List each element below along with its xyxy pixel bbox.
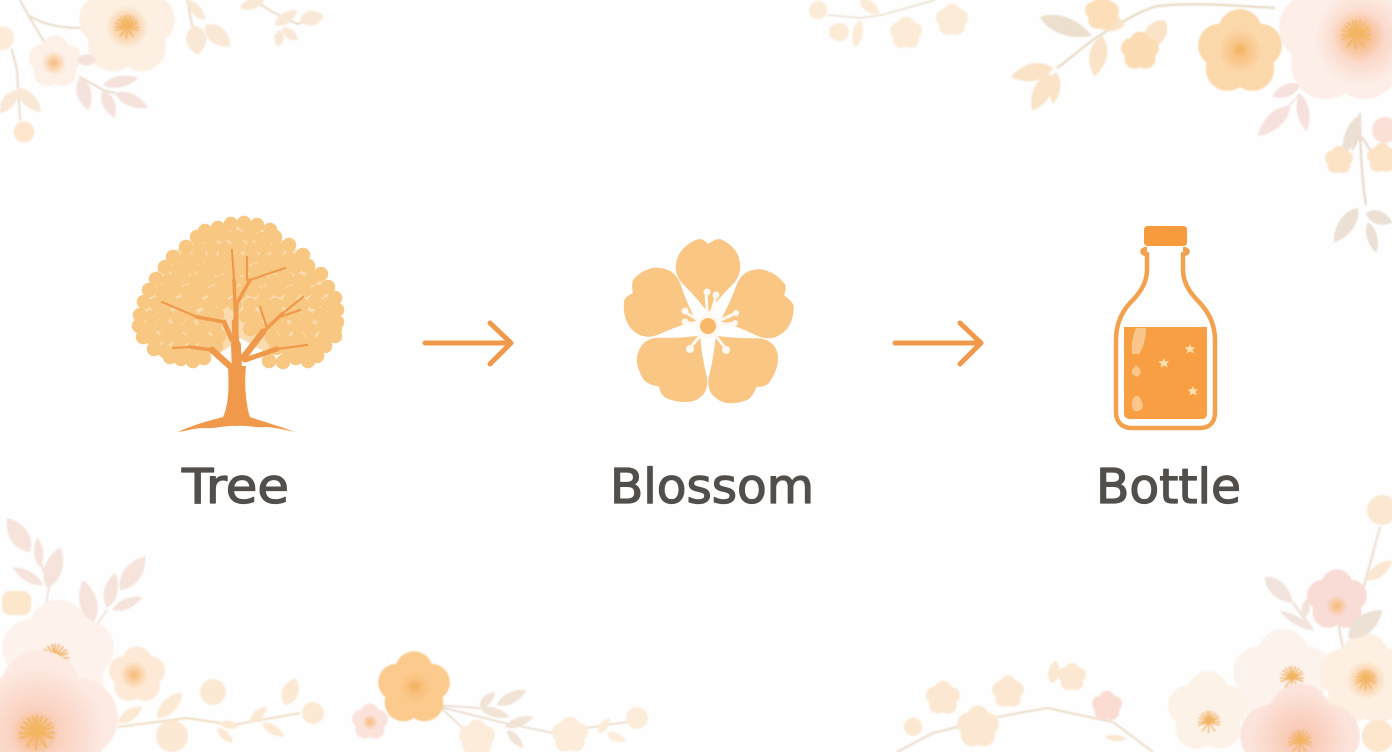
floral: top centre right sprig bbox=[809, 0, 968, 48]
bottle cap bbox=[1144, 226, 1187, 246]
floral corner: top left bbox=[0, 0, 325, 142]
bottle outline bbox=[1116, 249, 1215, 428]
floral corner: bottom left bbox=[0, 513, 324, 752]
tree branches bbox=[162, 250, 307, 372]
bottle liquid bbox=[1124, 327, 1207, 419]
floral corner: top right bbox=[1009, 0, 1392, 254]
liquid sparkles bbox=[1158, 344, 1198, 396]
arrow: tree to blossom bbox=[425, 323, 511, 364]
floral corner: bottom right bbox=[897, 495, 1392, 752]
blossom stamens bbox=[682, 288, 739, 354]
blossom centre bbox=[700, 318, 716, 334]
label: Tree: Tree bbox=[181, 459, 289, 515]
blossom petals bbox=[614, 239, 802, 415]
bottle icon bbox=[1116, 226, 1215, 428]
tree canopy bbox=[139, 223, 337, 362]
label: Blossom: Blossom bbox=[610, 459, 814, 515]
liquid highlights bbox=[1132, 328, 1146, 411]
arrow: blossom to bottle bbox=[895, 323, 981, 364]
tree trunk bbox=[178, 366, 295, 432]
tree icon bbox=[139, 223, 337, 432]
floral: bottom centre sprig bbox=[352, 651, 648, 752]
blossom icon bbox=[614, 239, 802, 415]
label: Bottle: Bottle bbox=[1096, 459, 1241, 515]
